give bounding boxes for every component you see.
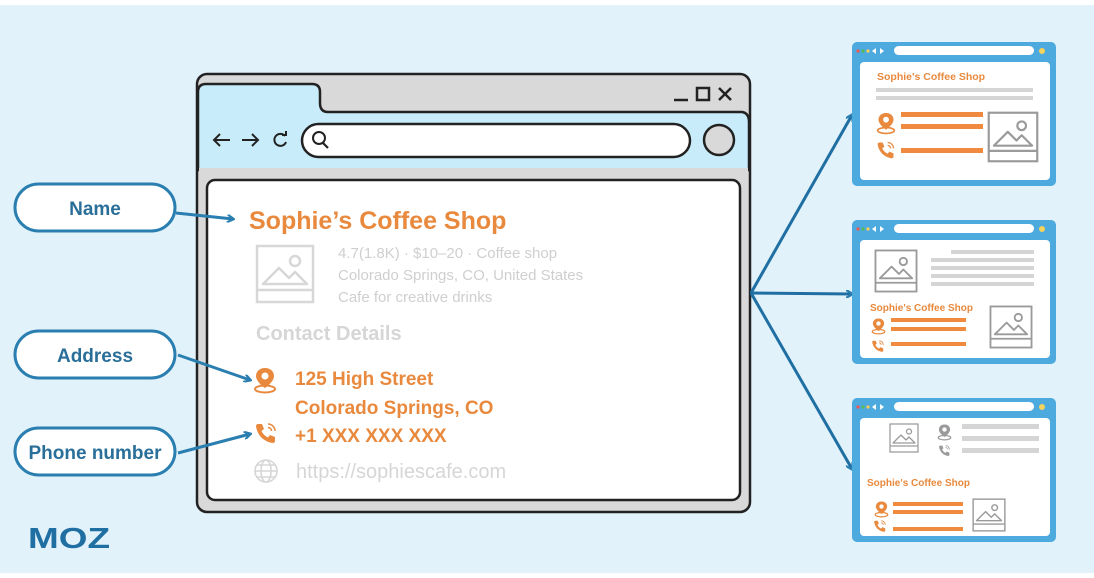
nav icons (214, 131, 286, 146)
business name: Sophie’s Coffee Shop (249, 207, 506, 235)
search bar (302, 124, 690, 157)
label: Name: Name (69, 199, 121, 220)
business info: Cafe for creative drinks (338, 289, 492, 306)
label: Phone number: Phone number (28, 443, 162, 464)
arrows to mini browsers (751, 115, 852, 469)
label: Address: Address (57, 346, 133, 367)
content panel (207, 180, 740, 500)
mini browser 2 (852, 220, 1056, 364)
business info: 4.7(1.8K) · $10–20 · Coffee shop (338, 245, 557, 262)
business info (338, 245, 583, 306)
main browser window (197, 74, 750, 512)
mini browser 1: Sophie's Coffee Shop (877, 71, 985, 83)
arrow: name (176, 213, 233, 219)
phone: +1 XXX XXX XXX (295, 426, 447, 447)
arrow: address (178, 355, 250, 380)
logo: MOZ: MOZ (28, 523, 110, 555)
mini browser 3 (852, 398, 1056, 542)
label: Address (15, 331, 175, 378)
label: Phone number (15, 428, 175, 475)
address: Colorado Springs, CO (295, 398, 493, 419)
contact details heading: Contact Details (256, 323, 402, 345)
mini browser 1 (852, 42, 1056, 186)
business info: Colorado Springs, CO, United States (338, 267, 583, 284)
label: Name (15, 184, 175, 231)
address (255, 368, 493, 419)
arrow: phone (178, 434, 250, 453)
mini browser 2: Sophie's Coffee Shop (870, 303, 973, 314)
window controls (674, 88, 731, 100)
mini browser 3: Sophie's Coffee Shop (867, 478, 970, 489)
image placeholder (256, 244, 314, 304)
website: https://sophiescafe.com (296, 461, 506, 483)
address: 125 High Street (295, 369, 434, 390)
